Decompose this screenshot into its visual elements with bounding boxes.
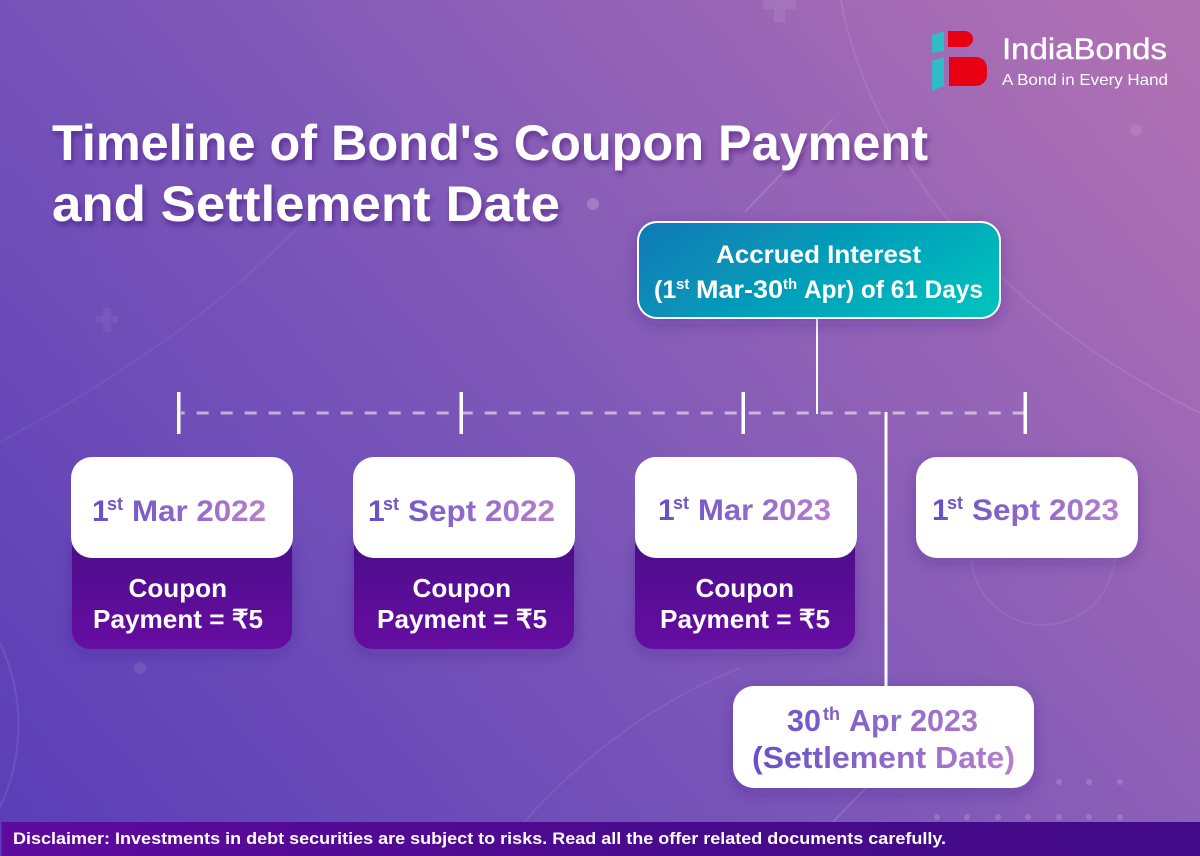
title: and Settlement Date [52,176,560,232]
timeline axis with ticks [177,392,1027,434]
callout: accrued interest: Apr) of 61 Days [804,276,983,304]
icon: IndiaBonds mark [932,31,987,91]
panel: 1st Sept 2023: Sept 2023 [972,494,1119,527]
callout: accrued interest: Accrued Interest [716,241,922,269]
panel: 1st Mar 2023 coupon: Payment = ₹5 [660,604,830,634]
panel: 1st Mar 2022 coupon: Payment = ₹5 [93,604,263,634]
logo wordmark: IndiaBonds [1002,33,1167,66]
panel: settlement date: (Settlement Date) [752,740,1015,775]
disclaimer bar [2,822,1200,856]
panel: 1st Sept 2022 coupon: 1 [368,495,385,528]
title: Timeline of Bond's Coupon Payment [52,115,928,171]
callout: accrued interest: Mar-30 [696,276,783,304]
panel: settlement date: th [823,704,845,724]
panel: 1st Mar 2023 coupon: Coupon [696,573,794,603]
panel: 1st Sept 2023 [916,457,1138,558]
panel: 1st Sept 2023: 1 [932,494,949,527]
callout: accrued interest: st [676,276,694,293]
panel: 1st Mar 2023 coupon [635,457,857,649]
panel: 1st Mar 2022 coupon: 1 [92,495,109,528]
connector: accrued interest to timeline [816,318,818,414]
panel: 1st Sept 2022 coupon: Payment = ₹5 [377,604,547,634]
callout: accrued interest: (1 [654,276,676,304]
panel: 1st Sept 2022 coupon: Sept 2022 [408,495,555,528]
logo: IndiaBonds [932,31,1168,91]
panel: 1st Mar 2022 coupon: Mar 2022 [132,495,266,528]
panel: 1st Sept 2023: st [947,493,968,513]
panel: 1st Sept 2022 coupon [353,457,575,649]
logo tagline: A Bond in Every Hand [1002,72,1168,89]
title [52,115,928,232]
connector: settlement date to timeline [884,412,888,687]
callout: accrued interest [638,222,1000,318]
panel: 1st Sept 2022 coupon: st [383,494,404,514]
panel: 1st Mar 2022 coupon: Coupon [128,573,227,603]
callout: accrued interest: th [783,276,801,293]
panel: 1st Mar 2023 coupon: st [673,493,694,513]
panel: 1st Mar 2022 coupon: st [107,494,128,514]
panel: 1st Sept 2022 coupon: Coupon [412,573,511,603]
panel: 1st Mar 2023 coupon: Mar 2023 [698,494,831,527]
panel: 1st Mar 2023 coupon: 1 [658,494,675,527]
panel: settlement date: 30 [787,703,821,738]
disclaimer bar: Disclaimer: Investments in debt securities are subject to risks. Read all the offer related documents carefully. [13,829,946,848]
panel: settlement date [733,686,1034,788]
panel: 1st Mar 2022 coupon [71,457,293,649]
panel: settlement date: Apr 2023 [849,703,978,738]
